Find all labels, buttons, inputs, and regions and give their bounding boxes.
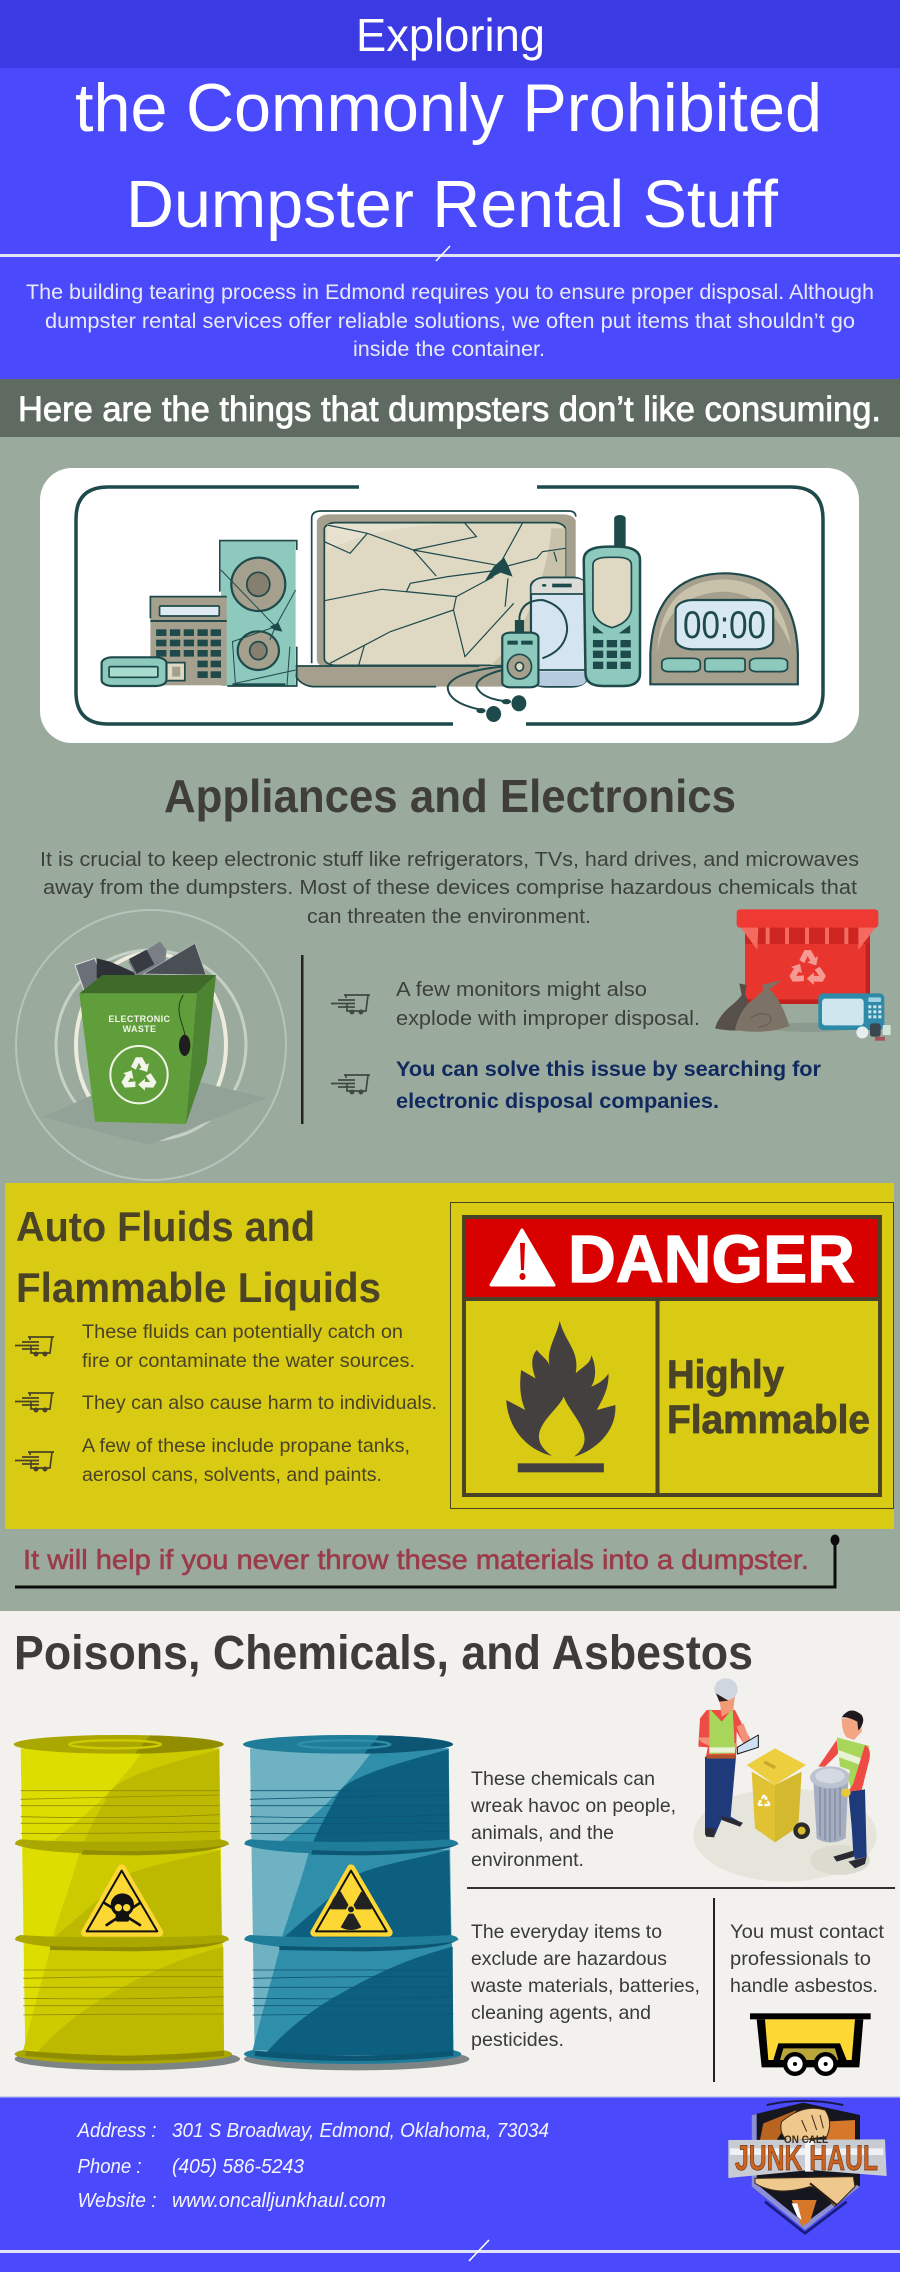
text: chemicals wreak havoc: These chemicals can — [471, 1768, 655, 1790]
icon: yellow trailer — [750, 2013, 871, 2076]
danger sign: Highly — [667, 1353, 785, 1397]
illustration: broken electronics — [40, 468, 859, 743]
text: chemicals wreak havoc — [470, 1768, 676, 1871]
bin label — [108, 1014, 170, 1034]
icon: USB drive — [102, 657, 185, 686]
footer panel — [0, 2096, 900, 2272]
callout: electronic disposal companies — [331, 1058, 821, 1113]
heading: poisons: Poisons, Chemicals, and Asbestos — [14, 1627, 753, 1680]
heading: auto fluids: Flammable Liquids — [16, 1264, 381, 1311]
text: contact professionals: handle asbestos. — [730, 1975, 878, 1997]
bullet list: aerosol cans, solvents, and paints. — [82, 1464, 382, 1486]
danger sign — [450, 1202, 894, 1508]
icon: yellow toxic barrel — [14, 1735, 240, 2070]
intro paragraph — [26, 280, 874, 361]
title: Dumpster Rental Stuff: Dumpster Rental Stuff — [126, 167, 778, 242]
text: contact professionals: professionals to — [730, 1948, 871, 1970]
contact details: 301 S Broadway, Edmond, Oklahoma, 73034 — [172, 2120, 549, 2142]
icon: cell phone — [584, 515, 640, 686]
danger sign: DANGER — [568, 1222, 855, 1297]
banner: things dumpsters don't like: Here are the things that dumpsters don’t like consuming. — [18, 390, 881, 429]
icon: green e-waste bin with rings — [16, 910, 286, 1180]
icon: red recycling dumpster with bags and microwave — [715, 909, 891, 1041]
icon: speaker — [220, 541, 297, 686]
contact details: Address : — [77, 2120, 156, 2142]
banner: things dumpsters don't like — [0, 379, 900, 437]
callout: monitors explode: A few monitors might also — [396, 978, 647, 1001]
callout: electronic disposal companies: electronic disposal companies. — [396, 1090, 719, 1113]
callout: never throw these materials — [15, 1534, 840, 1587]
devices in bin — [75, 942, 206, 993]
callout: never throw these materials: It will help if you never throw these materials into a dumpster. — [23, 1544, 809, 1575]
logo: On Call Junk Haul — [728, 2101, 887, 2233]
icon: workers with bins — [693, 1678, 877, 1882]
panel: poisons, chemicals, asbestos — [0, 1611, 900, 2097]
text: everyday items: waste materials, batteries, — [470, 1975, 700, 1997]
icon: mp3 player with earphones — [448, 600, 567, 722]
header panel — [0, 0, 900, 379]
text: chemicals wreak havoc: wreak havoc on people, — [470, 1795, 676, 1817]
text: contact professionals: You must contact — [730, 1921, 885, 1943]
heading: auto fluids: Auto Fluids and — [16, 1203, 315, 1250]
bullet list — [15, 1321, 437, 1486]
bullet list: They can also cause harm to individuals. — [82, 1392, 437, 1414]
text: everyday items: pesticides. — [471, 2029, 564, 2051]
intro paragraph: dumpster rental services offer reliable solutions, we often put items that shouldn’t go — [45, 309, 855, 333]
bin label: WASTE — [123, 1024, 156, 1034]
icon: cracked laptop — [293, 511, 576, 687]
text: everyday items: exclude are hazardous — [471, 1948, 667, 1970]
bin label: ELECTRONIC — [108, 1014, 170, 1024]
contact details: www.oncalljunkhaul.com — [172, 2190, 386, 2212]
text: contact professionals — [730, 1921, 885, 1997]
logo: On Call Junk Haul: ON CALL — [784, 2134, 828, 2146]
page background: sage — [0, 437, 900, 1611]
bullet list: A few of these include propane tanks, — [82, 1435, 410, 1457]
appliances paragraph: can threaten the environment. — [307, 905, 591, 928]
bullet list: fire or contaminate the water sources. — [82, 1350, 415, 1372]
text: chemicals wreak havoc: environment. — [471, 1849, 584, 1871]
icon: calculator — [150, 597, 227, 685]
text: everyday items: The everyday items to — [471, 1921, 662, 1943]
title: Exploring: Exploring — [356, 9, 545, 61]
text: chemicals wreak havoc: animals, and the — [471, 1822, 614, 1844]
appliances paragraph — [40, 848, 859, 928]
intro paragraph: The building tearing process in Edmond requires you to ensure proper disposal. Although — [26, 280, 874, 304]
icon: blue radioactive barrel — [243, 1735, 469, 2070]
contact details: Phone : — [78, 2156, 142, 2178]
callout: electronic disposal companies: You can solve this issue by searching for — [396, 1058, 821, 1081]
callout: monitors explode — [331, 978, 700, 1030]
icon: digital clock body — [650, 573, 798, 684]
danger sign: Flammable — [667, 1398, 870, 1442]
contact details: (405) 586-5243 — [172, 2156, 304, 2178]
contact details — [77, 2120, 549, 2212]
appliances paragraph: away from the dumpsters. Most of these devices comprise hazardous chemicals that — [43, 876, 857, 899]
heading: auto fluids — [16, 1203, 381, 1311]
title: the Commonly Prohibited: the Commonly Prohibited — [75, 70, 822, 146]
heading: Appliances and Electronics: Appliances and Electronics — [164, 770, 736, 822]
callout: monitors explode: explode with improper disposal. — [396, 1007, 700, 1030]
intro paragraph: inside the container. — [353, 337, 545, 361]
icon: flame — [506, 1321, 615, 1472]
clock digits: 00:00 — [683, 604, 766, 647]
icon: smartphone — [531, 578, 587, 687]
bullet list: These fluids can potentially catch on — [82, 1321, 403, 1343]
text: everyday items — [470, 1921, 700, 2051]
contact details: Website : — [78, 2190, 156, 2212]
appliances paragraph: It is crucial to keep electronic stuff like refrigerators, TVs, hard drives, and microwaves — [40, 848, 859, 871]
panel: auto fluids and flammable liquids — [5, 1183, 894, 1529]
text: everyday items: cleaning agents, and — [471, 2002, 651, 2024]
